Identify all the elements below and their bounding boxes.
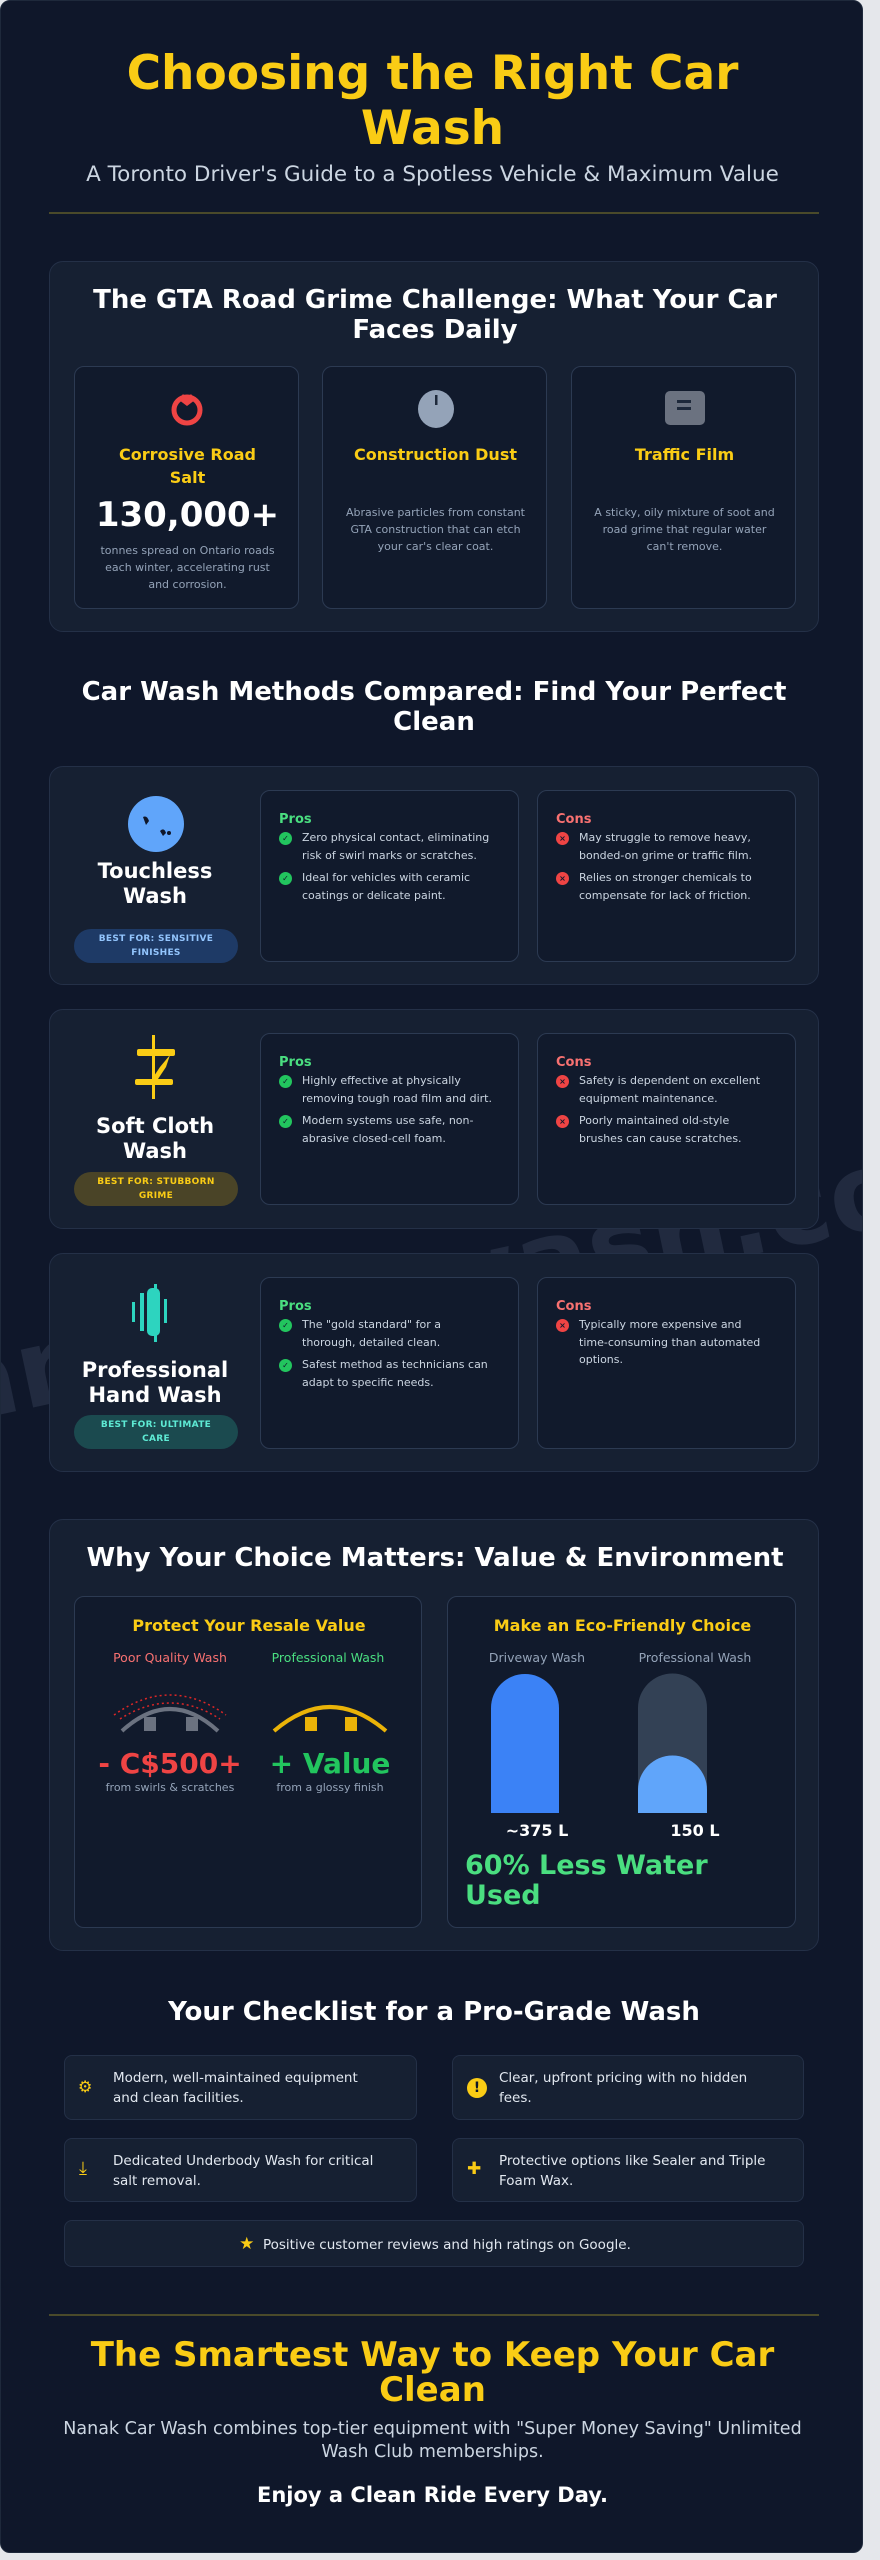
eco box: 150 L [670,1821,720,1840]
item: underbody: salt removal. [113,2173,201,2189]
panel: road grime challenge [49,261,819,632]
cons [537,1277,796,1449]
item: pricing: fees. [499,2090,532,2106]
pros [260,1033,519,1205]
cons: Safety is dependent on excellent [579,1074,760,1087]
card: construction dust: Construction Dust [354,445,517,464]
item: equipment [64,2055,417,2120]
stat: water saving: Used [465,1880,541,1911]
pros: abrasive closed-cell foam. [302,1132,446,1144]
icon: glossy car [272,1704,388,1732]
item: pricing: Clear, upfront pricing with no hidden [499,2070,747,2086]
cons: bonded-on grime or traffic film. [579,848,752,862]
title [127,46,738,156]
icon: soft cloth [135,1035,175,1099]
resale box: Professional Wash [272,1650,384,1665]
pros: thorough, detailed clean. [302,1336,440,1348]
card: road salt: Corrosive Road [119,445,256,464]
item: underbody: ⤓ [79,2158,87,2179]
cons: × [559,1117,566,1126]
cons: × [559,874,566,883]
footer title [90,2335,774,2410]
pros: ✓ [282,1361,289,1370]
card: road salt: tonnes spread on Ontario roads [100,544,275,557]
cons: Cons [556,1299,591,1314]
pros: Pros [279,812,312,827]
heading: methods: Clean [393,707,475,737]
heading: grime: Faces Daily [352,315,518,345]
card: road salt: and corrosion. [148,578,227,591]
item: protective [452,2138,804,2202]
card: road salt: Salt [170,468,205,487]
panel: hand wash [49,1253,819,1472]
cons: Relies on stronger chemicals to [579,871,752,884]
cons: × [559,1077,566,1086]
icon: salt [172,394,202,426]
badge [74,1415,238,1449]
title: Choosing the Right Car [127,46,738,101]
pros: Modern systems use safe, non- [302,1114,473,1127]
pros: Zero physical contact, eliminating [302,831,489,844]
item: pricing [452,2055,804,2120]
cons [537,1033,796,1205]
panel: hand wash: Hand Wash [88,1383,222,1407]
eco box: Driveway Wash [489,1650,585,1665]
cons: time-consuming than automated [579,1336,760,1348]
icon: hand wash [132,1284,167,1342]
card: traffic film: can't remove. [647,540,722,553]
bar chart: water use [491,1674,707,1813]
pros: ✓ [282,1321,289,1330]
panel: touchless: Touchless [98,859,212,883]
card: traffic film: Traffic Film [635,445,734,464]
card: traffic film [571,366,796,609]
badge: GRIME [139,1191,173,1201]
card: construction dust [322,366,547,609]
pros: Ideal for vehicles with ceramic [302,871,470,884]
item: equipment: and clean facilities. [113,2090,244,2106]
checklist items [64,2055,804,2267]
card: construction dust: Abrasive particles from constant [346,506,525,519]
card: traffic film: A sticky, oily mixture of soot and [594,506,775,519]
card: construction dust: GTA construction that can etch [350,523,521,536]
resale box: Protect Your Resale Value [132,1616,366,1635]
item: reviews [64,2220,804,2267]
heading: value: Why Your Choice Matters: Value & Environment [86,1543,784,1573]
icon: scratched car [114,1694,226,1732]
item: protective: ✚ [467,2159,481,2179]
panel: hand wash: Professional [82,1358,228,1382]
footer title: The Smartest Way to Keep Your Car [91,2335,774,2375]
cons: × [559,834,566,843]
cons: brushes can cause scratches. [579,1132,742,1144]
footer title: Clean [379,2370,486,2410]
pros: Highly effective at physically [302,1074,461,1087]
footer text: Wash Club memberships. [321,2442,544,2462]
cons: compensate for lack of friction. [579,888,751,902]
pros: ✓ [282,834,289,843]
badge: BEST FOR: STUBBORN [97,1177,215,1187]
pros: Pros [279,1055,312,1070]
pros: Safest method as technicians can [302,1358,488,1371]
heading: grime [93,285,777,345]
footer text [63,2419,802,2462]
cons: Cons [556,812,591,827]
item: equipment: ⚙ [78,2077,92,2096]
eco box [447,1596,796,1928]
item: equipment: Modern, well-maintained equipment [113,2070,358,2086]
badge: CARE [142,1434,170,1444]
footer text: Nanak Car Wash combines top-tier equipment with "Super Money Saving" Unlimited [63,2419,802,2439]
stat: water saving: 60% Less Water [465,1850,708,1881]
stat: 130000: 130,000+ [96,495,279,535]
card: traffic film: road grime that regular water [603,523,766,536]
item: reviews: ★ Positive customer reviews and high ratings on Google. [239,2234,631,2254]
pros: ✓ [282,874,289,883]
cons [537,790,796,962]
icon: touchless [128,796,184,852]
card: road salt: each winter, accelerating rust [105,561,270,574]
heading: checklist: Your Checklist for a Pro-Grade Wash [168,1997,700,2027]
item: protective: Foam Wax. [499,2173,573,2189]
item: underbody [64,2138,417,2202]
panel: soft cloth: Soft Cloth [96,1114,214,1138]
cons: Cons [556,1055,591,1070]
resale box [74,1596,422,1928]
pros [260,790,519,962]
panel: value & environment [49,1519,819,1951]
eco box: ~375 L [506,1821,568,1840]
resale box: - C$500+ [98,1747,242,1780]
title: Wash [361,101,504,156]
pros: Pros [279,1299,312,1314]
badge [74,1172,238,1206]
card: road salt [74,366,299,609]
icon: dust [418,390,454,428]
heading: methods [82,677,786,737]
pros: ✓ [282,1117,289,1126]
tagline: Enjoy a Clean Ride Every Day. [257,2483,608,2507]
cons: options. [579,1353,623,1366]
resale box: + Value [270,1747,390,1780]
heading: grime: The GTA Road Grime Challenge: What Your Car [93,285,777,315]
panel: touchless [49,766,819,985]
cons: × [559,1321,566,1330]
pros: ✓ [282,1077,289,1086]
item: pricing: ! [474,2080,480,2096]
pros: coatings or delicate paint. [302,888,446,902]
panel: soft cloth [49,1009,819,1229]
resale box: Poor Quality Wash [113,1650,227,1665]
item: protective: Protective options like Sealer and Triple [499,2153,765,2169]
item: underbody: Dedicated Underbody Wash for critical [113,2153,373,2169]
cons: Typically more expensive and [579,1318,742,1331]
subtitle: A Toronto Driver's Guide to a Spotless Vehicle & Maximum Value [86,162,779,187]
badge: FINISHES [131,948,181,958]
pros: The "gold standard" for a [302,1318,441,1331]
eco box: Make an Eco-Friendly Choice [494,1616,751,1635]
pros: risk of swirl marks or scratches. [302,848,477,862]
panel: soft cloth: Wash [123,1139,187,1163]
badge [74,929,238,963]
icon: film [665,391,705,425]
pros: removing tough road film and dirt. [302,1092,492,1104]
panel: touchless: Wash [123,884,187,908]
cons: Poorly maintained old-style [579,1114,729,1127]
stat: water saving [465,1850,708,1911]
heading: methods: Car Wash Methods Compared: Find Your Perfect [82,677,786,707]
resale box: from swirls & scratches [106,1781,234,1794]
pros [260,1277,519,1449]
cons: equipment maintenance. [579,1092,718,1104]
pros: adapt to specific needs. [302,1376,434,1388]
resale box: from a glossy finish [276,1781,384,1794]
eco box: Professional Wash [639,1650,751,1665]
card: construction dust: your car's clear coat. [378,540,493,553]
badge: BEST FOR: SENSITIVE [99,934,213,944]
cons: May struggle to remove heavy, [579,831,751,844]
badge: BEST FOR: ULTIMATE [101,1420,211,1430]
